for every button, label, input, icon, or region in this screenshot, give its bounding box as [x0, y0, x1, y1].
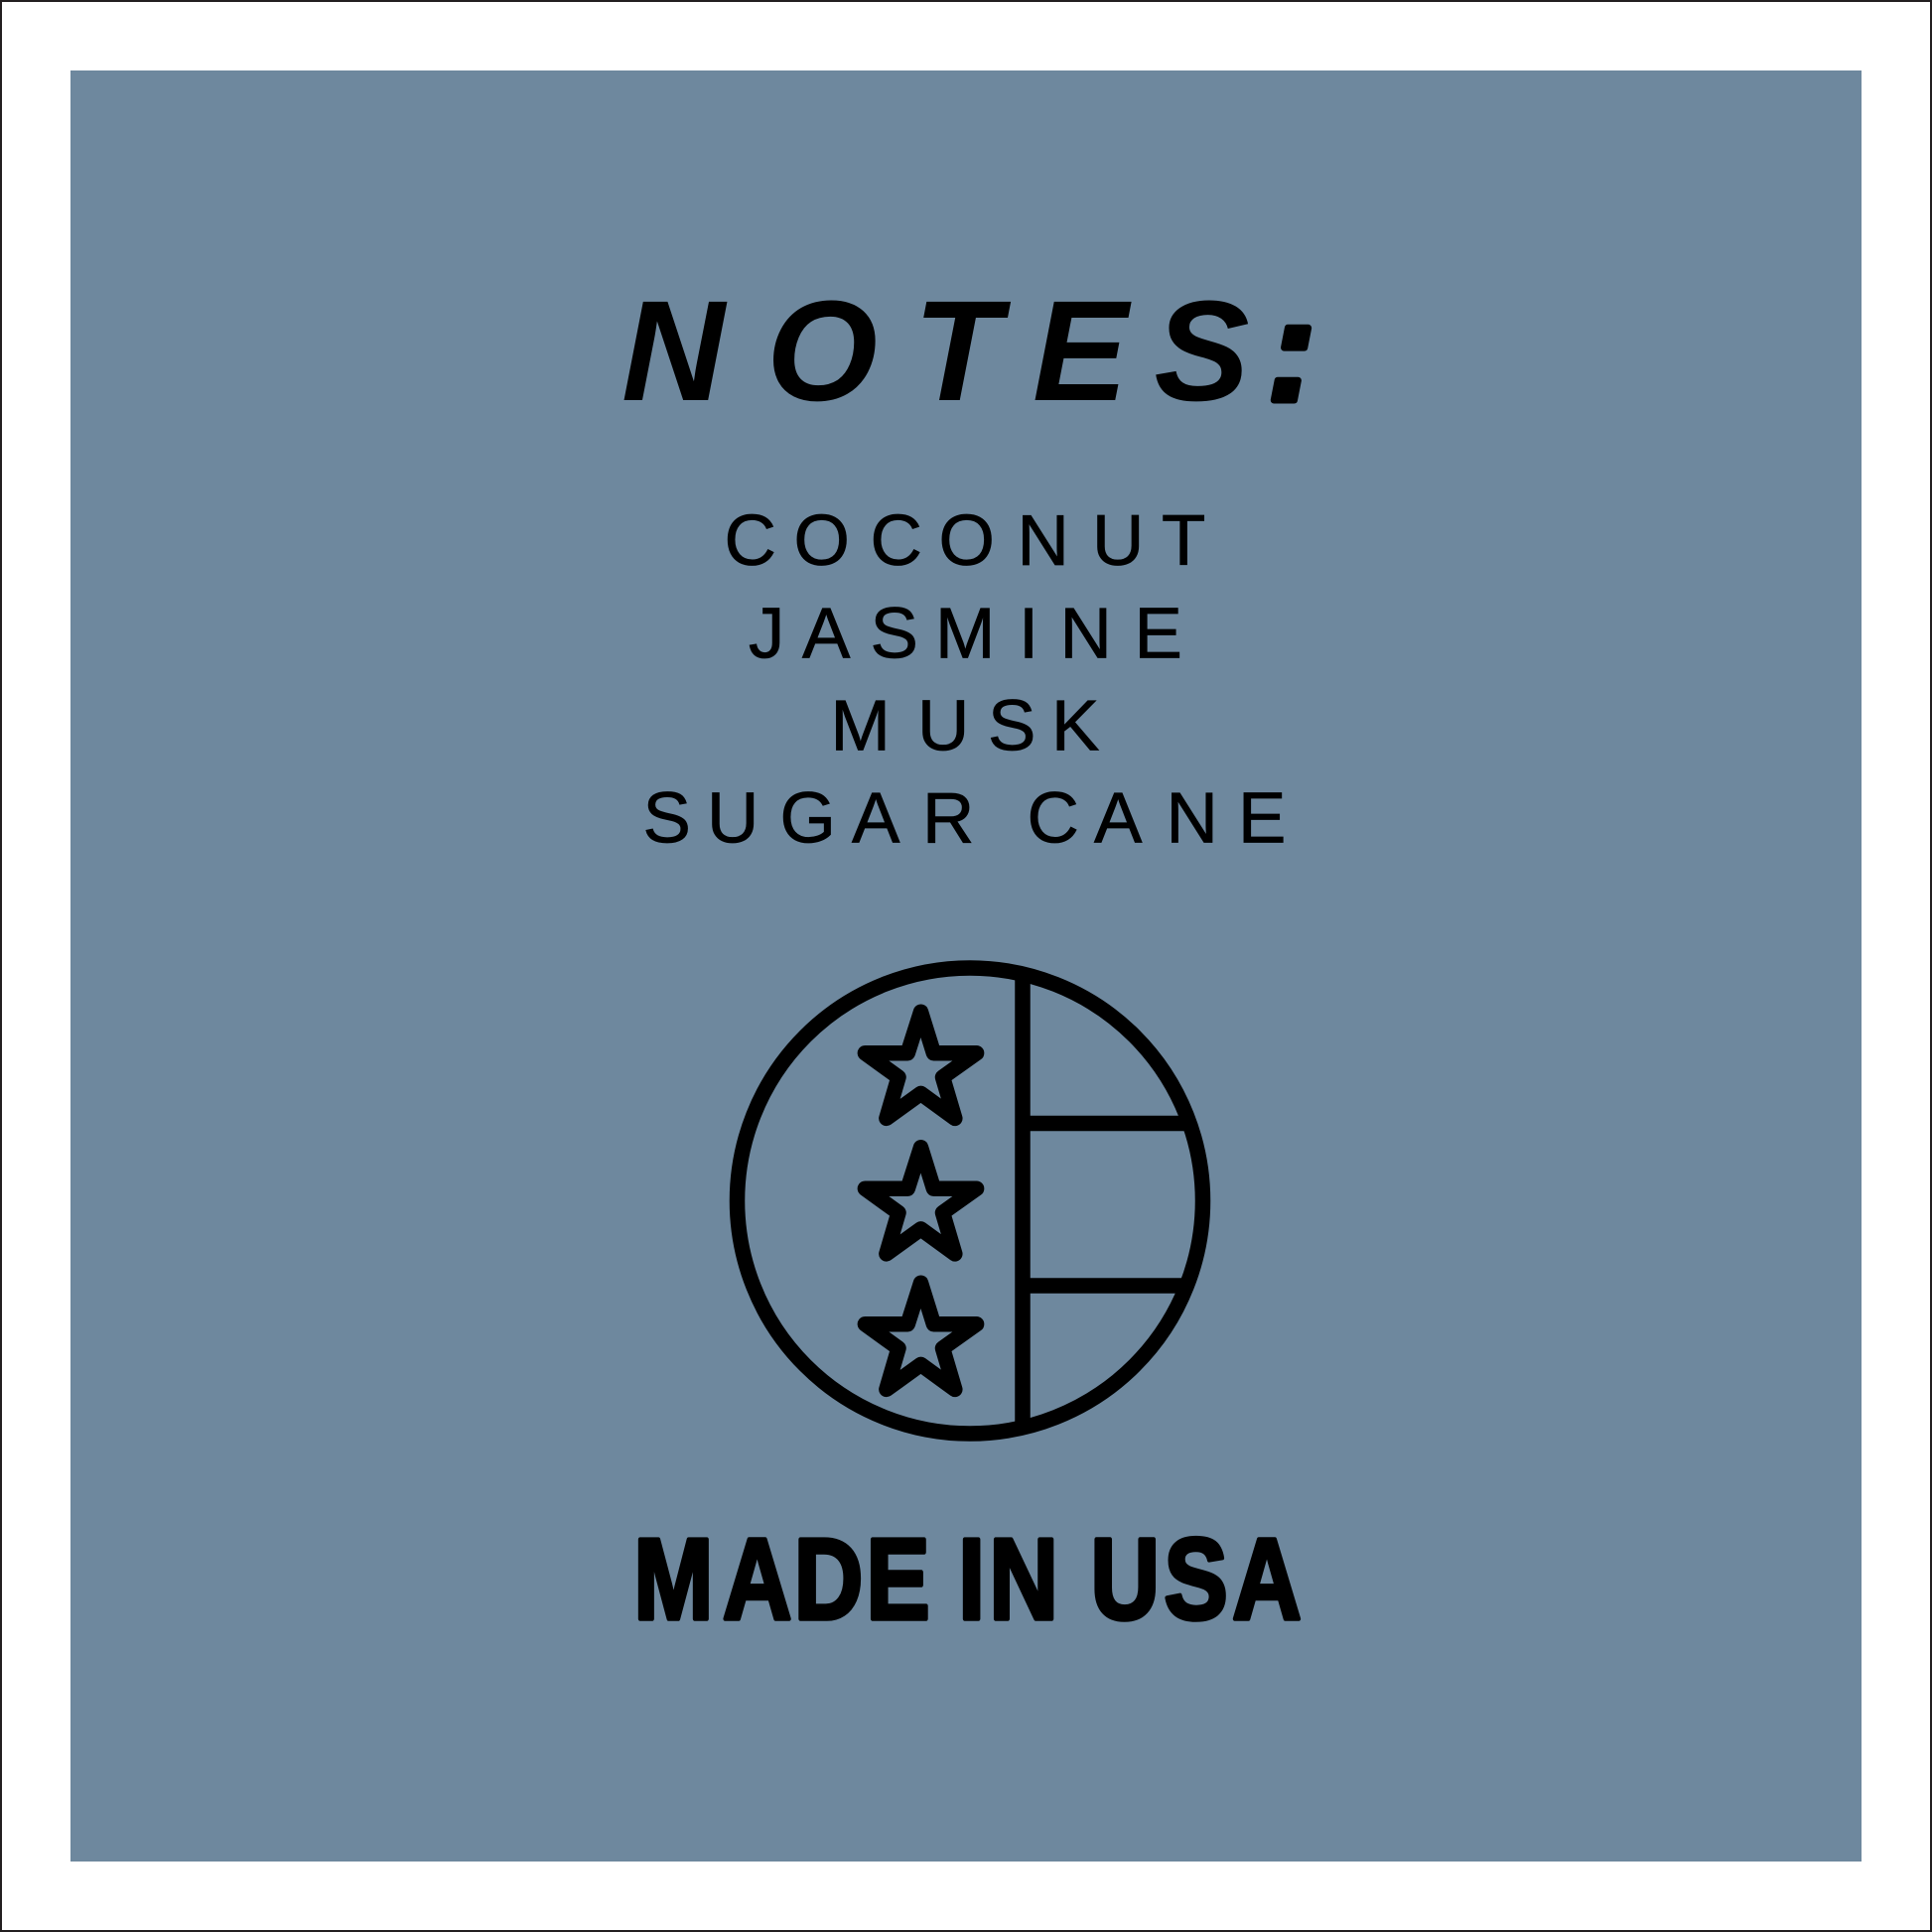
star 2 [865, 1148, 977, 1254]
list of scent notes [643, 500, 1286, 858]
note: coconut: COCONUT [725, 500, 1205, 581]
star 1 [865, 1012, 977, 1118]
flag vertical divider [1015, 970, 1031, 1432]
title: NOTES: [621, 271, 1315, 431]
flag upper stripe line [1023, 1116, 1188, 1131]
flag circle outline [737, 968, 1203, 1434]
flag lower stripe line [1023, 1278, 1188, 1294]
note: sugar cane: SUGAR CANE [643, 778, 1286, 858]
note: jasmine: JASMINE [749, 594, 1182, 673]
icon: round USA flag with three stars [737, 968, 1203, 1434]
star 3 [865, 1283, 977, 1389]
note: musk: MUSK [830, 685, 1099, 766]
made in USA label: MADE IN USA [633, 1515, 1302, 1644]
